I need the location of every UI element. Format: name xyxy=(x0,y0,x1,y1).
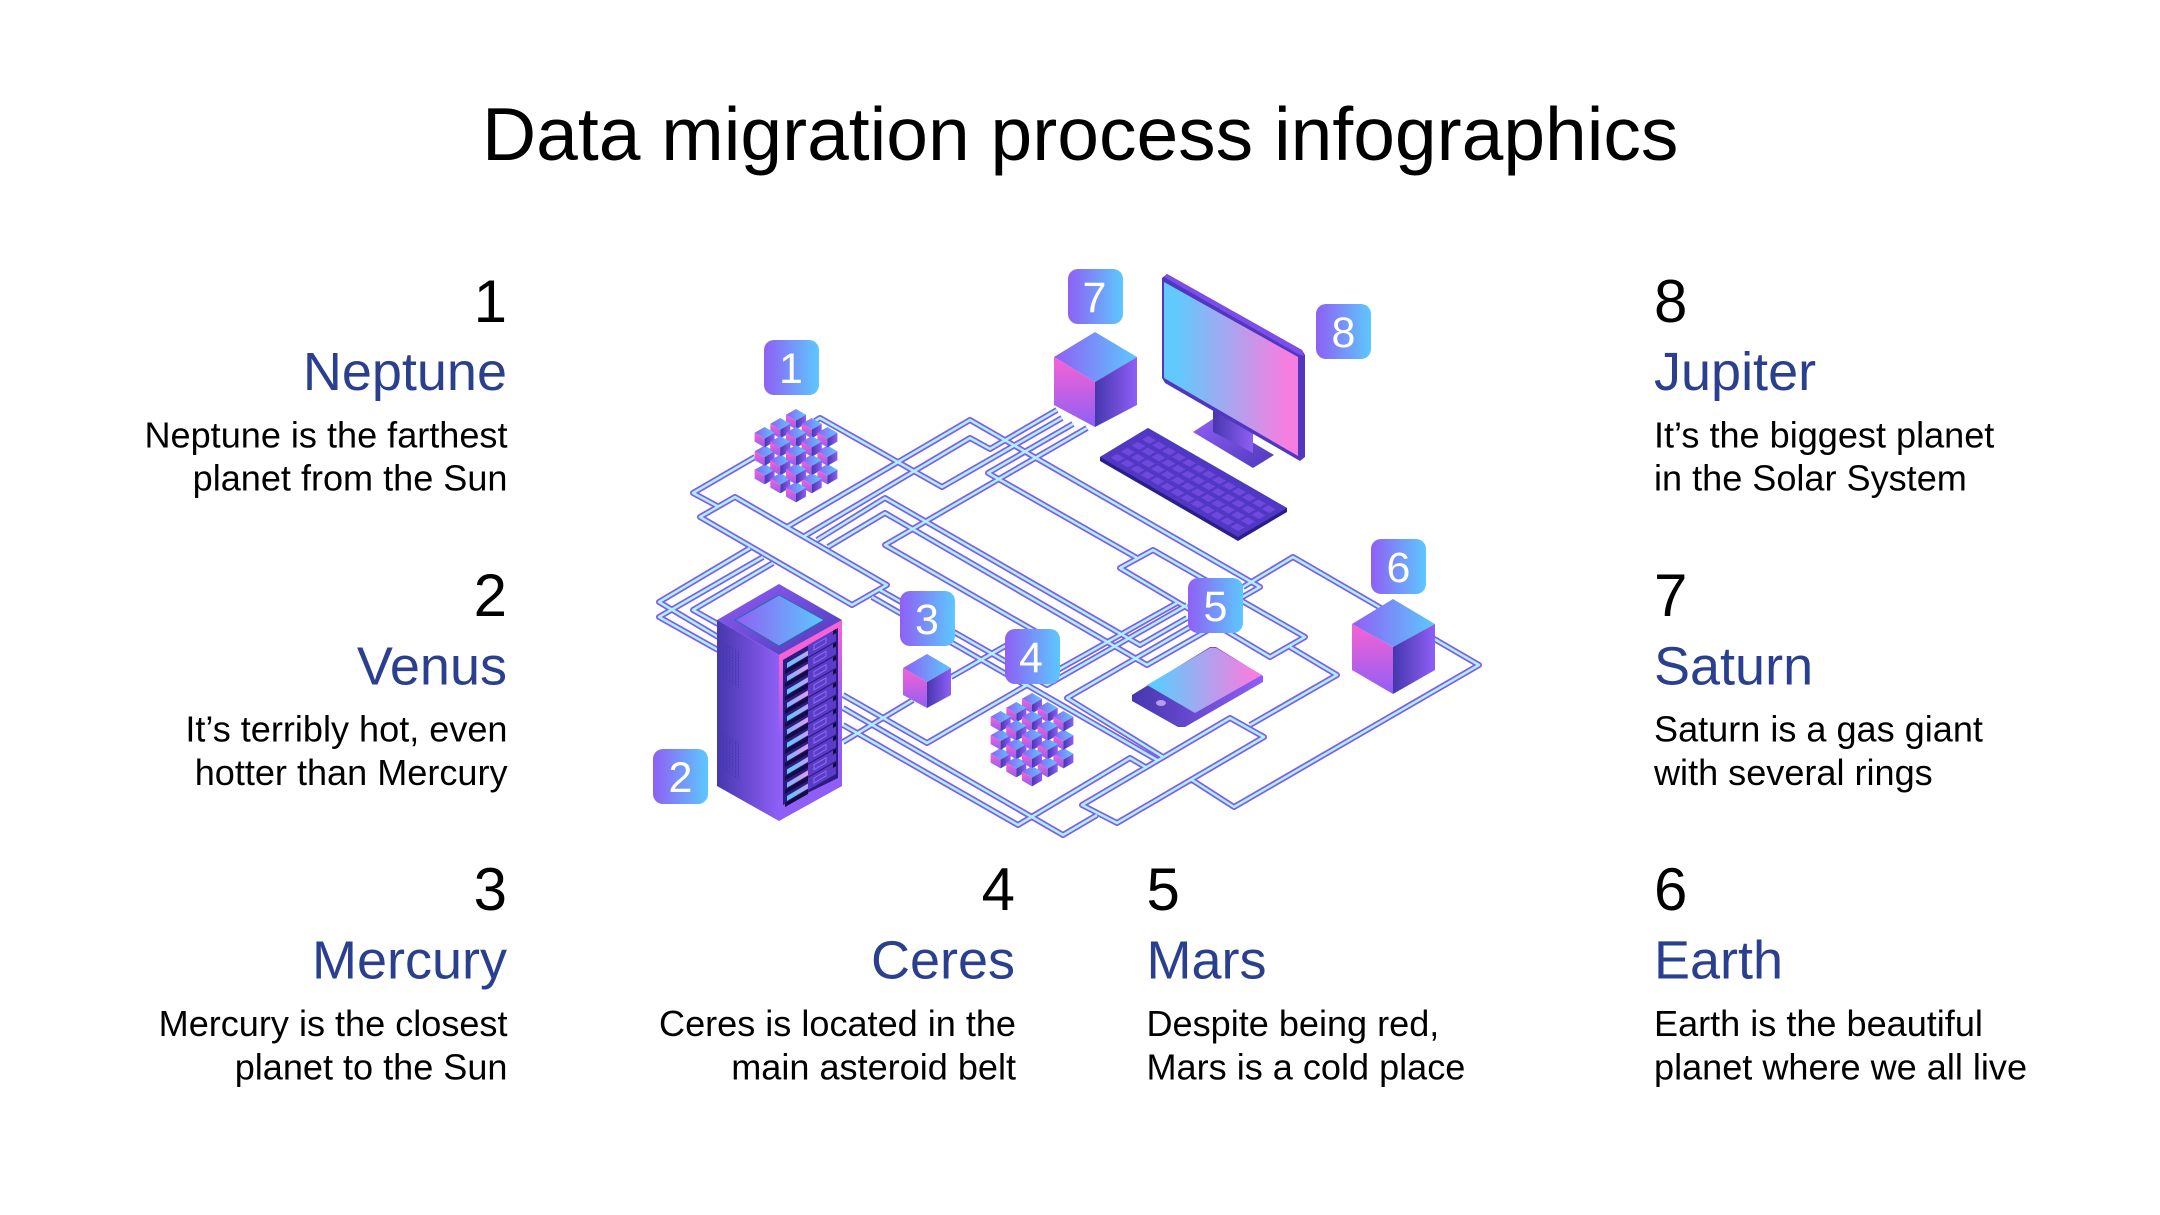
badge 3 xyxy=(900,591,955,646)
block 8: Jupiter: 8 xyxy=(1654,268,1687,335)
icon: server rack xyxy=(717,584,842,821)
block 1: Neptune: planet from the Sun xyxy=(193,458,508,498)
block 8: Jupiter: Jupiter xyxy=(1654,342,1816,402)
block 2: Venus: Venus xyxy=(357,636,507,696)
block 2: Venus: 2 xyxy=(474,562,507,629)
block 3: Mercury xyxy=(159,856,508,1088)
block 7: Saturn: with several rings xyxy=(1653,752,1933,793)
icon: monitor xyxy=(1162,274,1305,468)
block 8: Jupiter xyxy=(1654,268,1994,498)
badge 1: 1 xyxy=(779,345,803,393)
badge 1 xyxy=(764,340,819,395)
block 3: Mercury: 3 xyxy=(474,856,507,923)
block 5: Mars: 5 xyxy=(1146,856,1180,923)
block 4: Ceres: Ceres xyxy=(871,930,1015,990)
block 5: Mars: Mars is a cold place xyxy=(1146,1046,1465,1088)
icon: keyboard xyxy=(1100,428,1287,541)
block 6: Earth xyxy=(1654,856,2027,1088)
block 5: Mars: Mars xyxy=(1146,930,1266,990)
block 6: Earth: planet where we all live xyxy=(1654,1046,2027,1088)
badge 8: 8 xyxy=(1332,309,1355,357)
block 2: Venus: It’s terribly hot, even xyxy=(185,708,508,750)
icon: data cluster 1 xyxy=(755,409,837,502)
block 8: Jupiter: in the Solar System xyxy=(1654,458,1967,498)
block 4: Ceres: main asteroid belt xyxy=(731,1046,1016,1088)
block 2: Venus: hotter than Mercury xyxy=(195,752,508,793)
badge 7: 7 xyxy=(1083,274,1106,322)
badge 7 xyxy=(1068,269,1123,324)
badge 6: 6 xyxy=(1387,544,1410,592)
badge 2 xyxy=(653,749,708,804)
block 7: Saturn: 7 xyxy=(1654,562,1687,629)
block 7: Saturn: Saturn xyxy=(1654,636,1813,696)
block 2: Venus xyxy=(185,562,508,793)
badge 5 xyxy=(1188,578,1243,633)
block 6: Earth: Earth xyxy=(1654,930,1783,990)
title: Data migration process infographics xyxy=(482,92,1678,176)
icon: cube 6 xyxy=(1352,599,1435,694)
badge 4 xyxy=(1005,629,1060,684)
badge 8 xyxy=(1316,304,1371,359)
block 1: Neptune: Neptune xyxy=(303,342,507,402)
icon: tablet xyxy=(1132,647,1263,727)
block 3: Mercury: Mercury xyxy=(312,930,507,990)
badge 2: 2 xyxy=(669,754,692,802)
block 1: Neptune: Neptune is the farthest xyxy=(144,414,508,456)
block 1: Neptune xyxy=(144,268,508,498)
badge 3: 3 xyxy=(915,596,939,644)
badge 5: 5 xyxy=(1204,583,1227,631)
icon: cube 7 xyxy=(1054,332,1137,427)
block 3: Mercury: planet to the Sun xyxy=(235,1046,508,1088)
block 5: Mars xyxy=(1146,856,1465,1088)
block 7: Saturn: Saturn is a gas giant xyxy=(1654,708,1983,750)
badge 6 xyxy=(1371,539,1426,594)
block 4: Ceres: 4 xyxy=(982,856,1015,923)
block 6: Earth: Earth is the beautiful xyxy=(1654,1003,1983,1044)
block 7: Saturn xyxy=(1653,562,1983,793)
block 8: Jupiter: It’s the biggest planet xyxy=(1654,414,1994,456)
badge 4: 4 xyxy=(1019,634,1043,682)
block 1: Neptune: 1 xyxy=(474,268,507,335)
block 4: Ceres: Ceres is located in the xyxy=(659,1003,1016,1044)
circuit wires xyxy=(659,410,1479,835)
icon: data cluster 4 xyxy=(991,693,1073,786)
block 3: Mercury: Mercury is the closest xyxy=(159,1003,508,1044)
block 5: Mars: Despite being red, xyxy=(1146,1003,1439,1044)
block 4: Ceres xyxy=(659,856,1016,1088)
icon: cube 3 xyxy=(903,654,951,708)
block 6: Earth: 6 xyxy=(1654,856,1687,923)
